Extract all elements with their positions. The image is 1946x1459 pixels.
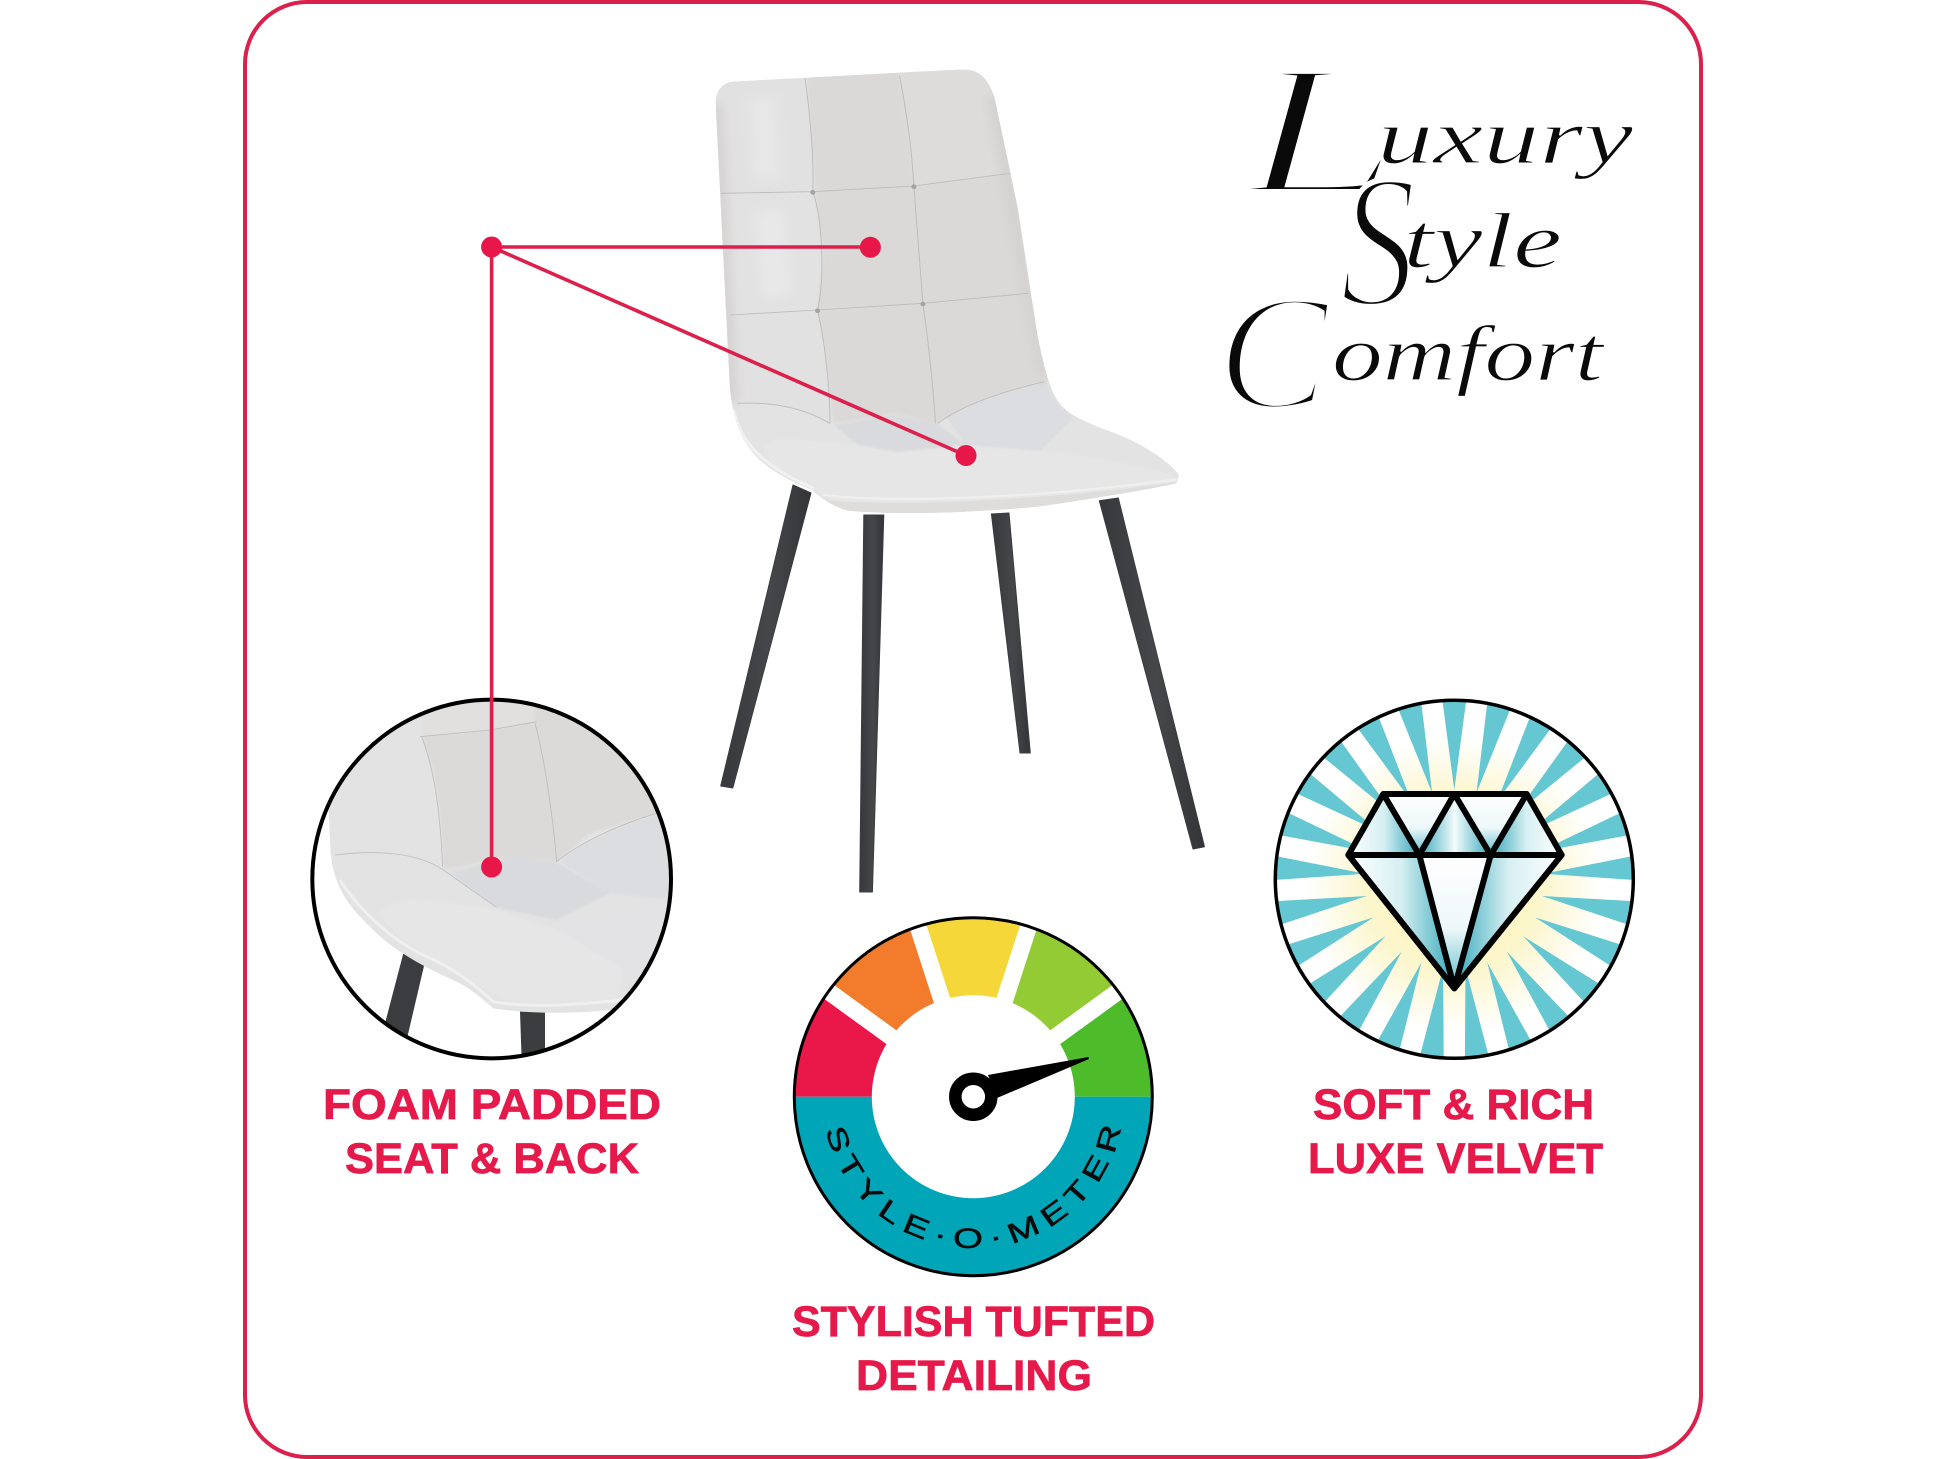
label: foam padded: FOAM PADDED: [323, 1081, 661, 1129]
page frame: [245, 2, 1701, 1457]
sunburst rays: [1277, 702, 1632, 1056]
callout dot: back: [860, 237, 881, 258]
gauge centre: [872, 995, 1075, 1198]
script: Style: S: [1340, 137, 1416, 347]
script: Luxury: L: [1235, 28, 1400, 233]
script title: [1217, 28, 1634, 444]
script: Comfort: C: [1217, 261, 1331, 444]
script: Luxury: uxury: [1377, 93, 1634, 180]
soft edge shading: [716, 97, 1048, 403]
circle: chair legs: [385, 953, 425, 1040]
gauge colour segments: [794, 918, 1152, 1276]
tuft dimples: [810, 184, 925, 313]
gauge needle: [955, 1057, 1089, 1115]
label: soft and rich: [1308, 1081, 1603, 1183]
diamond icon: [1348, 794, 1562, 988]
label: foam padded: SEAT & BACK: [345, 1135, 639, 1183]
script: Comfort: [1217, 261, 1606, 444]
gauge rim: [794, 918, 1152, 1276]
chair upholstery: [709, 63, 1187, 520]
badge rim: [1275, 700, 1633, 1058]
seat piping: [823, 479, 1176, 499]
chair legs: [721, 485, 1204, 892]
detail circle: foam padded seat: [310, 693, 677, 1063]
callout dot: detail: [481, 856, 502, 878]
callout lines and dots: [481, 236, 976, 878]
label: soft and rich: LUXE VELVET: [1308, 1135, 1603, 1183]
tufting seams: [721, 76, 1044, 423]
diamond badge: [1265, 690, 1644, 1069]
circle: chair body: [328, 716, 668, 1013]
script: Style: [1340, 137, 1562, 347]
gauge text: STYLE·O·METER: [827, 1126, 1122, 1248]
script: Style: tyle: [1403, 197, 1562, 284]
back centre panels: [807, 70, 1044, 423]
seat underside band: [831, 482, 1176, 512]
label: stylish tufted: [792, 1298, 1155, 1400]
chair photo: [709, 63, 1204, 892]
label: soft and rich: SOFT & RICH: [1313, 1081, 1594, 1129]
label: foam padded: [323, 1081, 661, 1183]
script: Luxury: [1235, 28, 1634, 233]
label: stylish tufted: STYLISH TUFTED: [792, 1298, 1155, 1346]
seat: [716, 382, 1187, 520]
style-o-meter gauge: [792, 916, 1154, 1278]
callout hub: [481, 236, 502, 258]
script: Comfort: omfort: [1332, 310, 1606, 397]
label: stylish tufted: DETAILING: [856, 1352, 1092, 1400]
callout dot: seat: [956, 445, 976, 466]
